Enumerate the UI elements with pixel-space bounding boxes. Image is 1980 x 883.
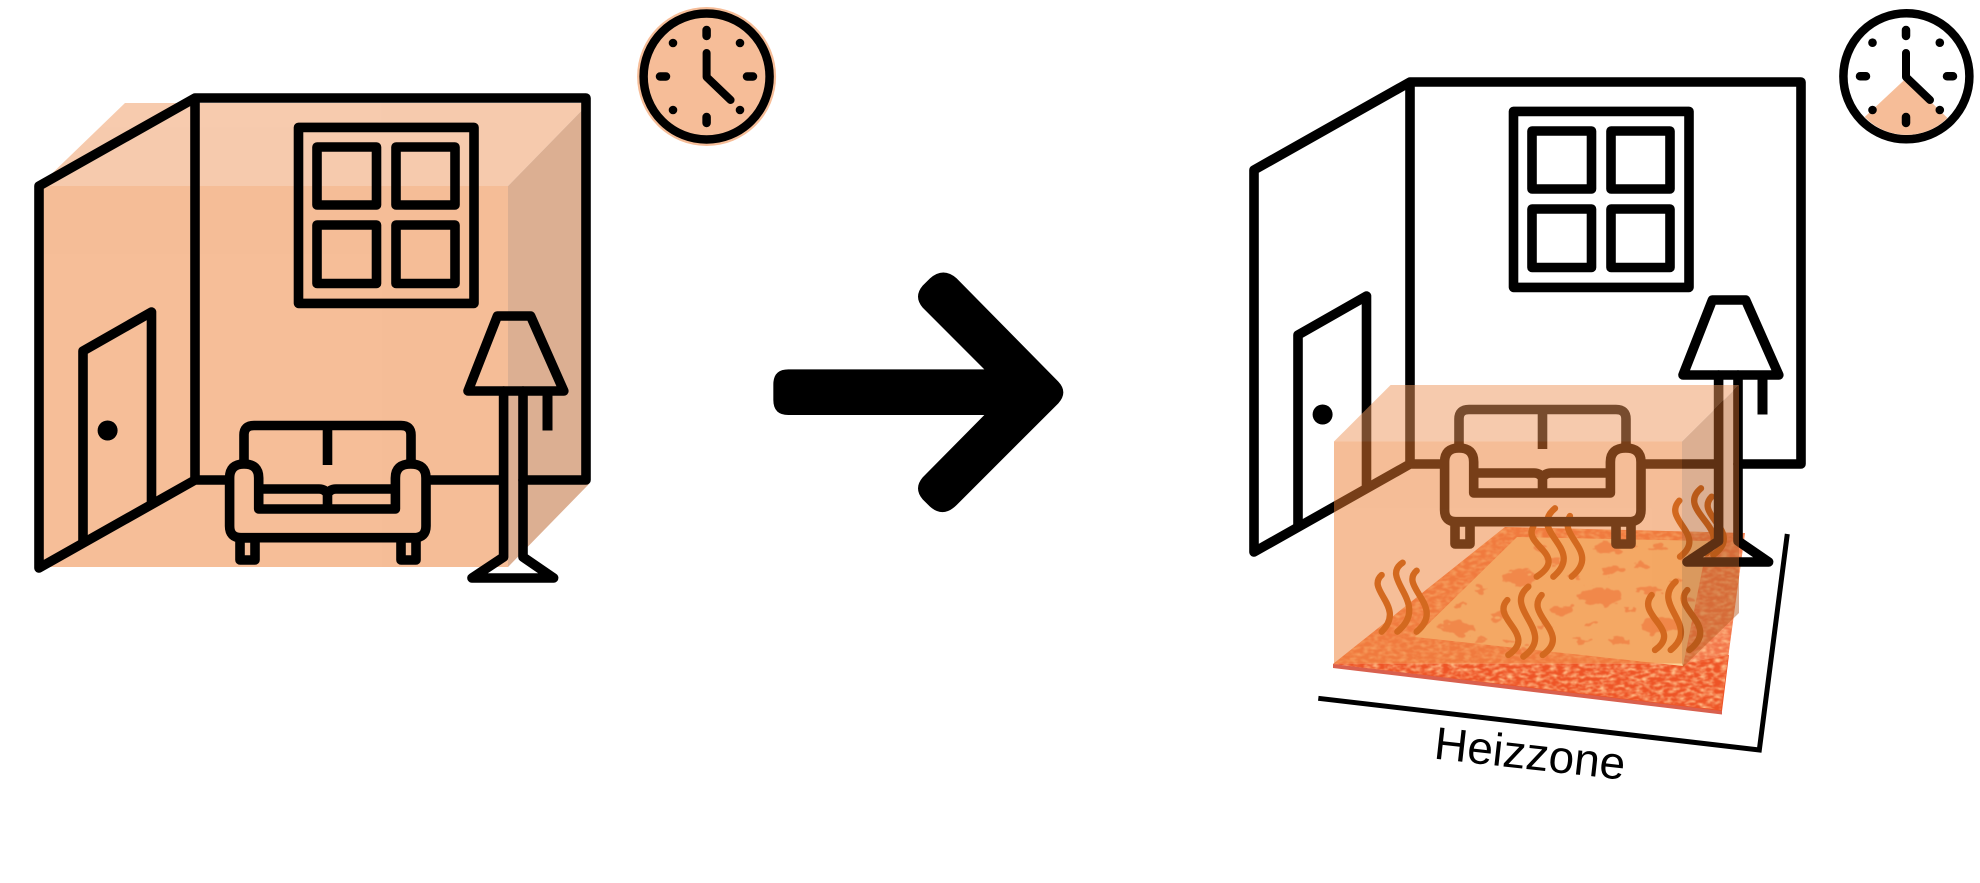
room outline with walls xyxy=(39,98,586,568)
heated volume: lower zone cube xyxy=(1334,385,1739,667)
label: Heizzone: Heizzone xyxy=(1432,717,1628,790)
heated carpet zone xyxy=(1333,527,1745,714)
window xyxy=(1514,111,1689,287)
door xyxy=(1298,296,1366,525)
sofa xyxy=(230,426,426,560)
door xyxy=(83,312,152,541)
heating zone bracket xyxy=(1318,534,1787,750)
clock: short heating period xyxy=(1843,13,1969,139)
room outline with walls xyxy=(1254,82,1801,552)
heated volume: whole room cube xyxy=(39,103,589,567)
clock: full day heating xyxy=(637,7,776,146)
steam waves xyxy=(1378,488,1724,657)
right panel: room line drawing xyxy=(1254,82,1801,562)
floor lamp xyxy=(1683,300,1779,562)
left panel: fully heated room xyxy=(39,98,589,578)
floor lamp xyxy=(468,316,564,578)
arrow xyxy=(773,272,1063,512)
window xyxy=(298,127,474,303)
sofa xyxy=(1445,410,1641,544)
